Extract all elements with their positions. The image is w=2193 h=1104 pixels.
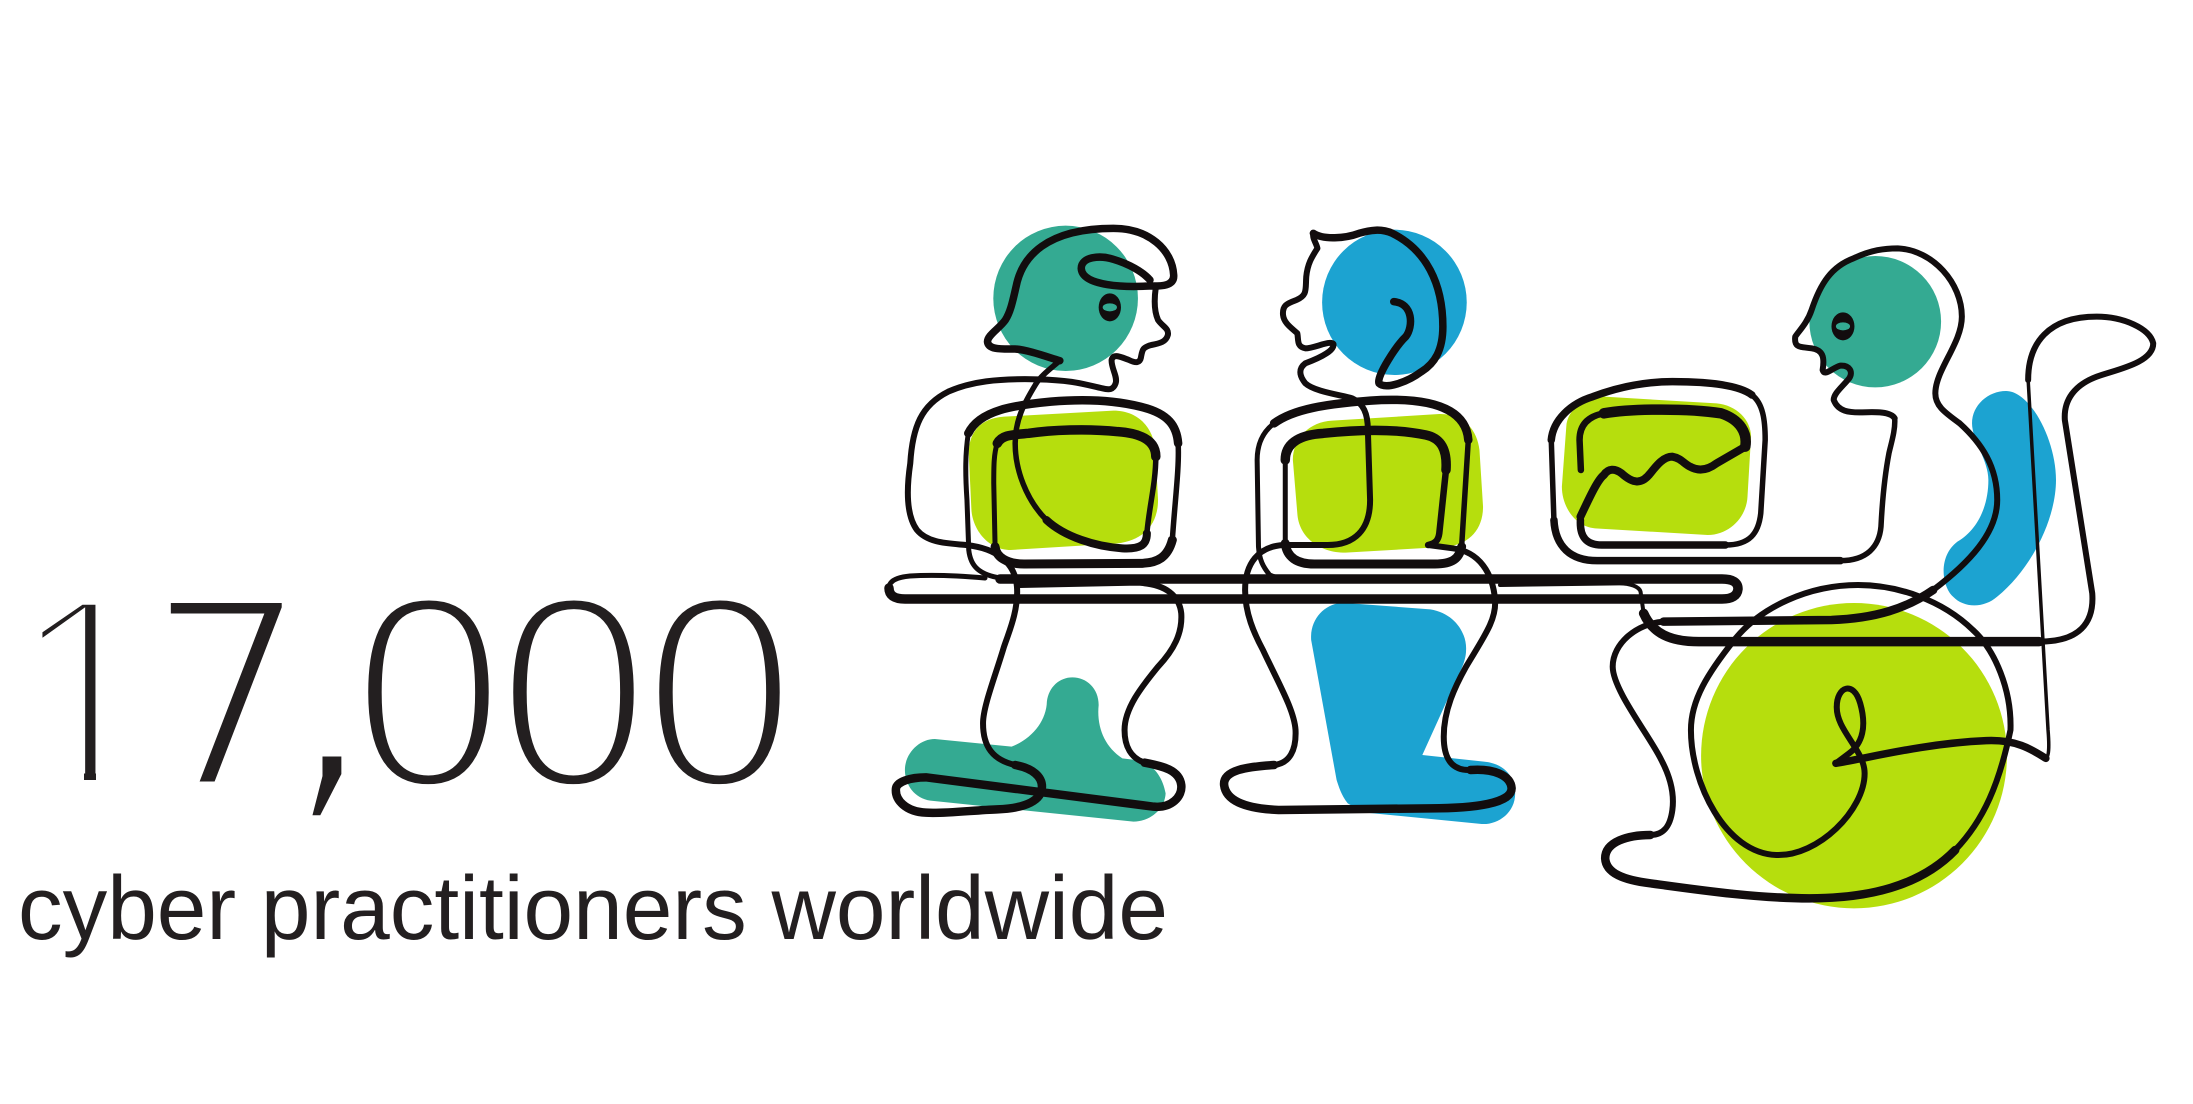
shape: lime ball seat	[1701, 603, 2007, 908]
big number: 17,000: 000	[352, 539, 796, 846]
monitor outline	[1840, 418, 1895, 561]
illustration: right colour shapes	[1562, 256, 2056, 908]
foot and ball bottom	[1605, 835, 1955, 898]
person right with chair: line drawing	[1500, 248, 2153, 898]
head and back	[1795, 248, 1997, 590]
shape: blue head	[1322, 230, 1467, 375]
hair and head outline	[988, 228, 1174, 361]
chair back	[2028, 317, 2153, 642]
right leg	[1428, 545, 1495, 770]
screen	[1147, 457, 1156, 533]
ball outline and thigh loop	[1691, 585, 2011, 855]
chart line on screen	[1580, 447, 1745, 517]
chair pole	[2028, 380, 2049, 758]
shape: lime monitor right	[1562, 397, 1751, 535]
seat stem	[1836, 741, 2046, 763]
person middle: line drawing	[1224, 230, 1512, 810]
shape: teal head right	[1809, 256, 1941, 387]
illustration: left and middle colour shapes	[905, 226, 1515, 824]
monitor outer	[1172, 443, 1178, 540]
shape: blue back	[1944, 391, 2056, 605]
table	[889, 575, 1738, 599]
foot	[1224, 765, 1512, 810]
chair base	[1644, 613, 2039, 642]
face, shoulder, arm and left leg	[908, 287, 1168, 765]
person left: line drawing	[896, 228, 1181, 813]
shape: lime monitor left	[969, 411, 1158, 550]
shape: teal head	[993, 226, 1138, 371]
forearm	[1664, 590, 1933, 622]
left foot	[896, 763, 1181, 813]
hair and ear	[1313, 230, 1443, 386]
icon: left person eye	[1099, 293, 1121, 321]
shape: lime monitor middle	[1293, 414, 1483, 553]
shape: teal legs	[905, 677, 1166, 822]
right leg	[1020, 583, 1181, 763]
neck and chin line	[1015, 361, 1060, 520]
icon: right person eye	[1831, 312, 1854, 340]
shape: blue legs	[1311, 603, 1515, 824]
big number: 17,000: ,	[283, 519, 375, 856]
big number: 17,000: 1	[9, 539, 162, 846]
face, arm and left leg	[1245, 233, 1370, 765]
subtitle: cyber practitioners worldwide: cyber practitioners worldwide	[18, 859, 1168, 959]
leg	[1613, 622, 1673, 835]
monitor outline	[1257, 423, 1296, 580]
big number: 17,000: 7	[144, 547, 309, 849]
